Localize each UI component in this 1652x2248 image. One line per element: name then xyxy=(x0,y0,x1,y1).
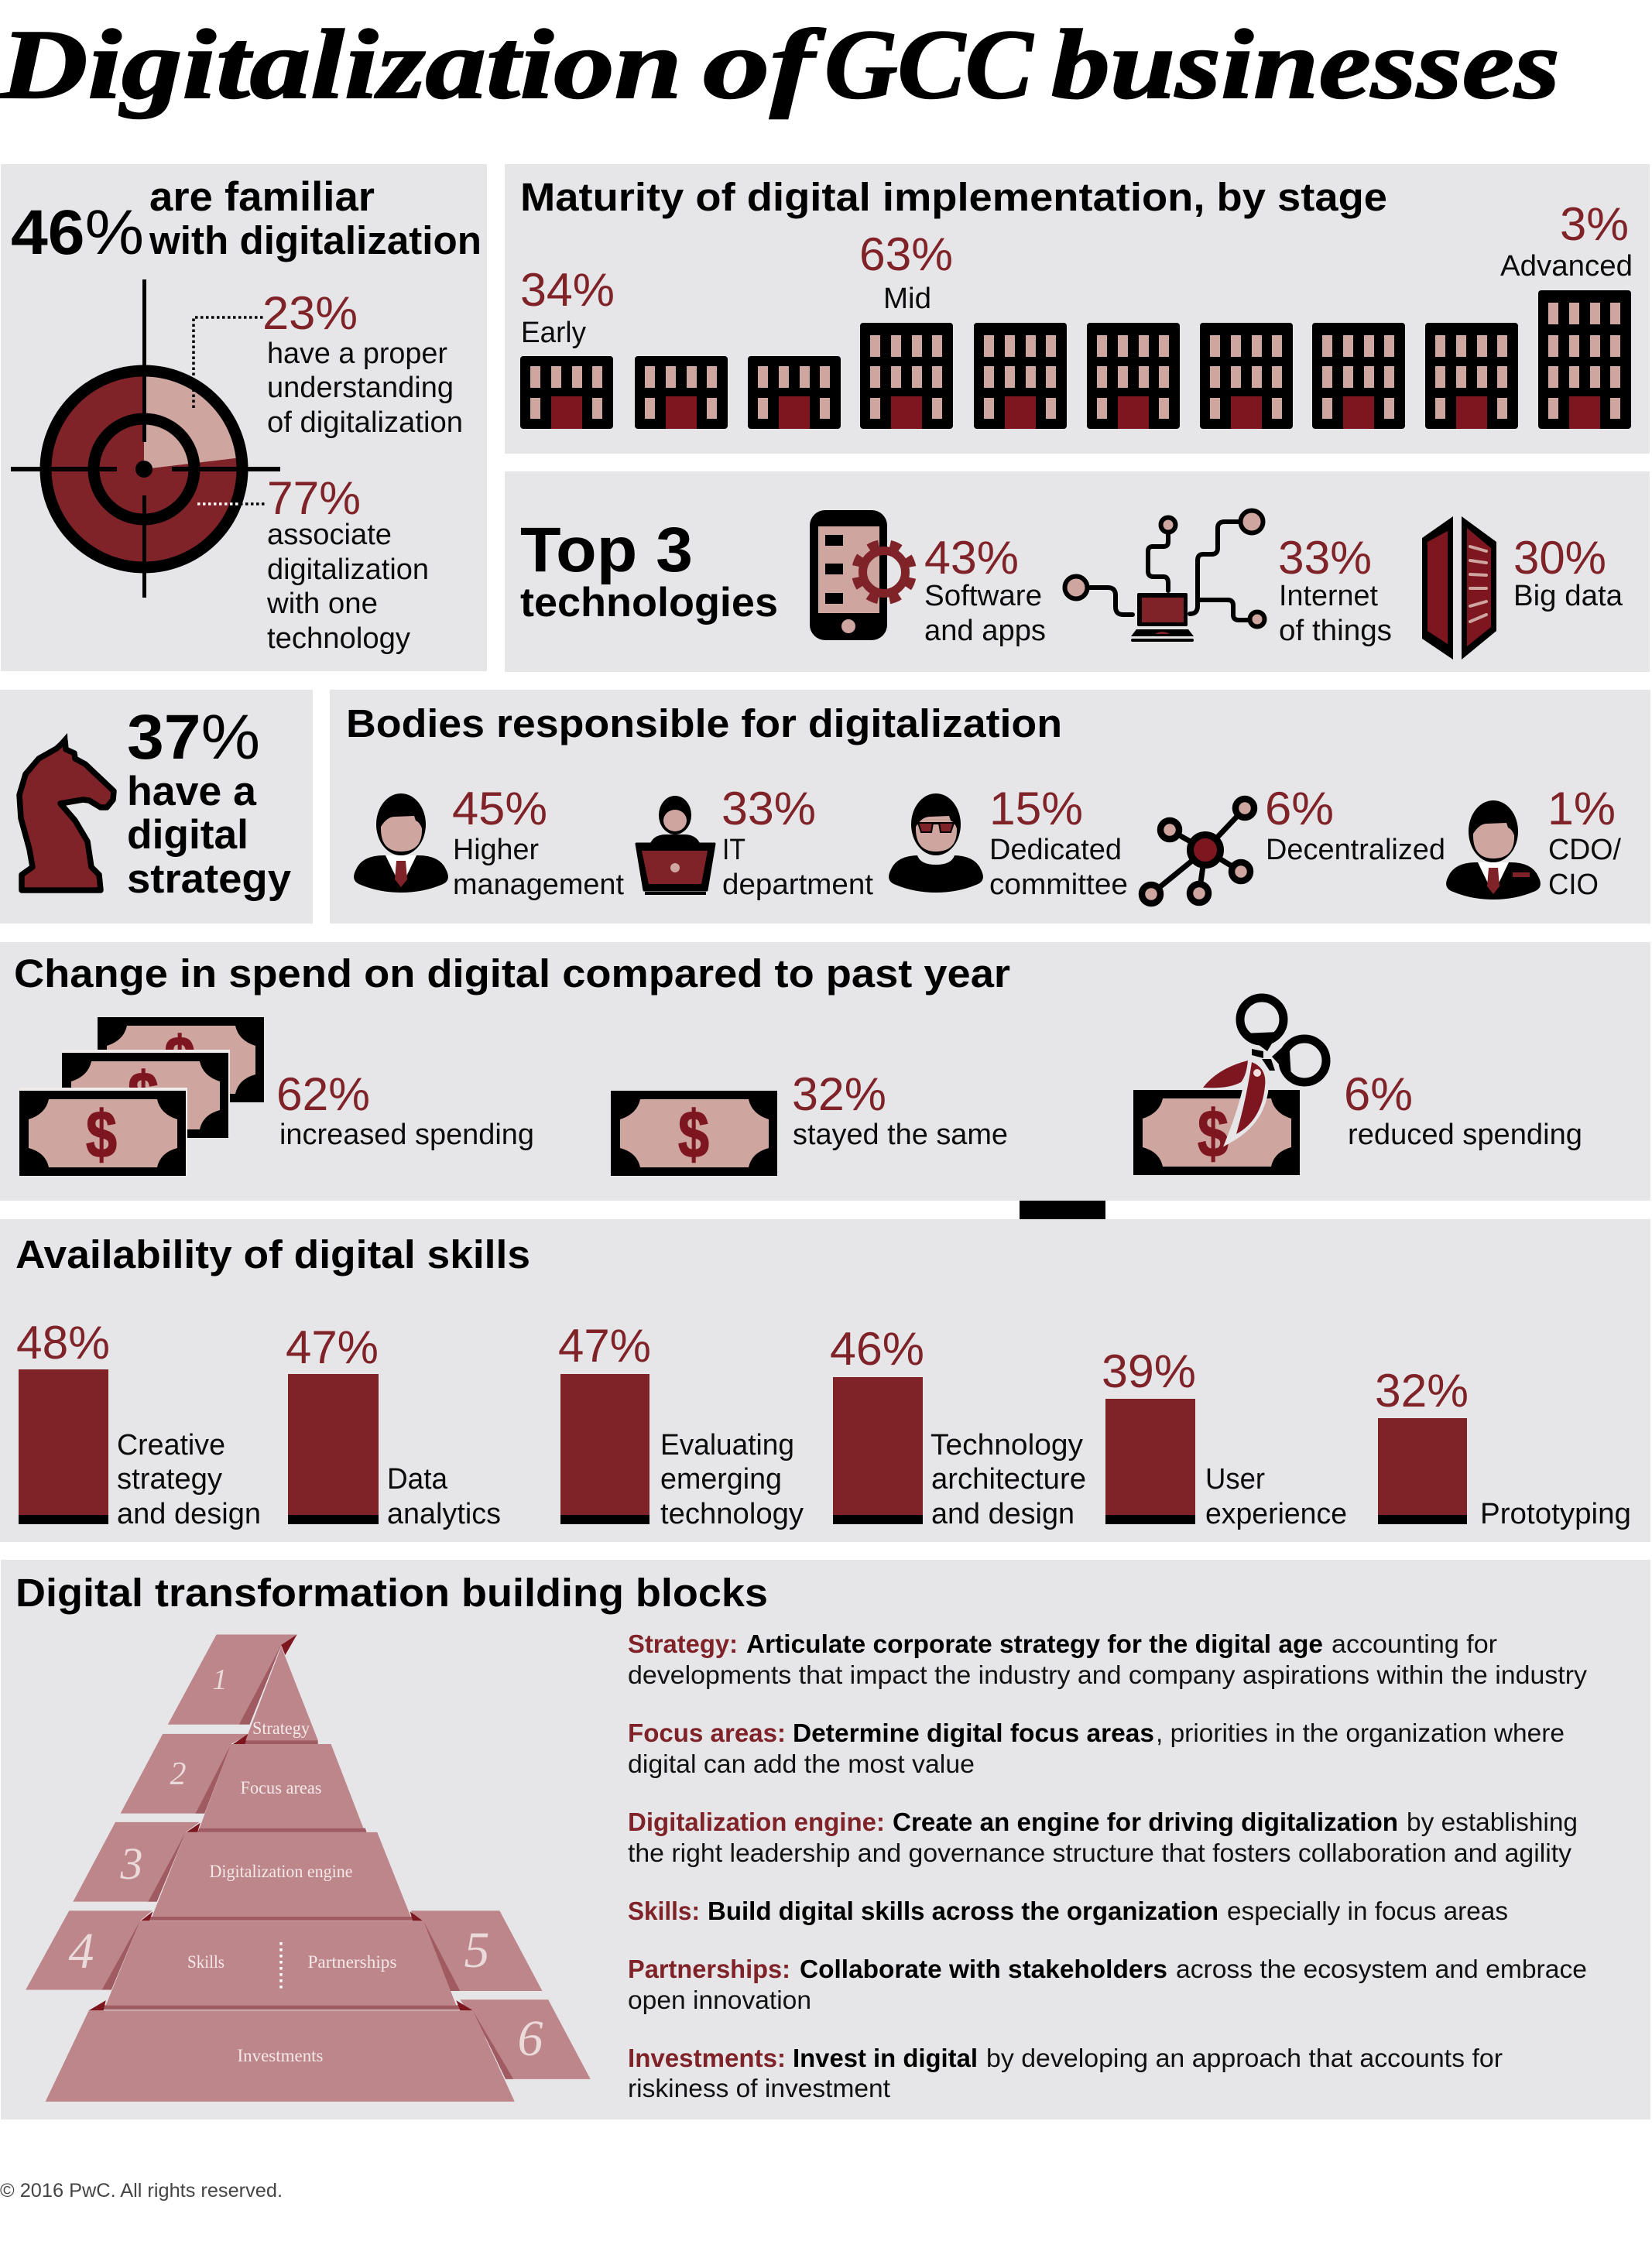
text: focus areas xyxy=(628,1719,1565,1778)
bar: data analytics xyxy=(286,1321,501,1530)
stat: advanced: 3% xyxy=(1560,198,1629,250)
diagram: pyramid: 4 xyxy=(68,1923,94,1979)
text: strategy xyxy=(628,1629,1588,1689)
bar: evaluating emerging technology xyxy=(558,1320,804,1530)
diagram: pyramid: Focus areas xyxy=(240,1778,322,1797)
title: GCC xyxy=(824,9,1034,119)
stat: advanced xyxy=(1500,198,1633,283)
stat: stayed: stayed the same xyxy=(793,1119,1008,1151)
bar: technology architecture xyxy=(830,1323,1086,1530)
panel: availability of digital skills xyxy=(0,1219,1650,1542)
icon: chess knight xyxy=(19,733,114,890)
text: partnerships xyxy=(628,1955,1587,2014)
panel: maturity by stage xyxy=(505,164,1650,454)
stat: early: Early xyxy=(521,317,586,349)
stat: 23%: 23% xyxy=(262,287,358,339)
stat: higher management xyxy=(452,783,624,901)
stat: IT department: IT xyxy=(722,834,745,866)
stat: software xyxy=(924,532,1046,647)
panel: digital strategy xyxy=(0,690,313,924)
stat: big data: 30% xyxy=(1513,532,1606,584)
text: skills: especially in focus areas xyxy=(1227,1897,1508,1925)
stat: big data: Big data xyxy=(1513,580,1623,612)
text: digitalization engine: Digitalization engine: xyxy=(628,1808,885,1836)
heading: maturity: Maturity of digital implementation, by stage xyxy=(520,175,1387,219)
bar: user experience: experience xyxy=(1205,1498,1347,1530)
bar: user experience: 39% xyxy=(1102,1345,1196,1397)
stat: decentralized: Decentralized xyxy=(1266,834,1445,866)
copyright: © 2016 PwC. All rights reserved. xyxy=(0,2180,283,2202)
text: investments xyxy=(628,2044,1503,2102)
text: partnerships: across the ecosystem and embrace xyxy=(1176,1955,1587,1983)
stat: increased: 62% xyxy=(276,1068,370,1120)
diagram: pyramid: Digitalization engine xyxy=(209,1862,353,1881)
bar: creative strategy xyxy=(16,1317,261,1530)
heading: top 3 xyxy=(520,515,778,625)
stat: mid xyxy=(859,228,953,315)
diagram: pyramid: 2 xyxy=(170,1756,186,1792)
icon: bill with scissors: $ xyxy=(1198,1097,1229,1171)
bar: creative strategy: and design xyxy=(117,1498,261,1530)
icon: stack of bills: $ xyxy=(128,1059,159,1133)
text: investments: Invest in digital xyxy=(793,2044,978,2072)
panel: familiarity with digitalization xyxy=(1,164,487,671)
heading: skills: Availability of digital skills xyxy=(15,1232,530,1276)
bar: technology architecture: 46% xyxy=(830,1323,924,1375)
heading: top 3: technologies xyxy=(520,580,778,625)
stat: software: Software xyxy=(924,580,1042,612)
text: focus areas: digital can add the most value xyxy=(628,1749,975,1778)
diagram: pyramid: 1 xyxy=(212,1664,228,1696)
icon: connected laptop xyxy=(1065,511,1265,642)
bar: creative strategy: 48% xyxy=(16,1317,110,1369)
stat: advanced: Advanced xyxy=(1500,250,1633,283)
stat: dedicated committee: 15% xyxy=(989,783,1083,834)
icon: single bill: $ xyxy=(678,1098,709,1172)
text: partnerships: Collaborate with stakeholders xyxy=(800,1955,1167,1983)
heading: familiar xyxy=(149,174,482,262)
diagram: pyramid xyxy=(26,1634,591,2102)
text: partnerships: open innovation xyxy=(628,1986,811,2014)
title: of xyxy=(703,9,826,119)
diagram: pyramid: Investments xyxy=(237,2046,324,2065)
dotted leader: 77% xyxy=(197,502,266,505)
stat: internet of things xyxy=(1278,532,1392,647)
text: investments: Investments: xyxy=(628,2044,786,2072)
stat: CDO/CIO: CIO xyxy=(1548,869,1599,901)
bar: prototyping: 32% xyxy=(1375,1365,1469,1417)
bar: technology architecture: architecture xyxy=(931,1463,1086,1496)
stat: mid: Mid xyxy=(883,283,931,315)
stat: stayed: 32% xyxy=(792,1068,886,1120)
stat: 77%: associate xyxy=(267,519,392,551)
panel: building blocks xyxy=(1,1560,1650,2119)
text: skills: Skills: xyxy=(628,1897,700,1925)
diagram: pyramid: 3 xyxy=(119,1838,142,1889)
stat: software: and apps xyxy=(924,615,1046,647)
bar: prototyping xyxy=(1375,1365,1631,1530)
stat: decentralized xyxy=(1265,783,1445,866)
stat: 77%: with one xyxy=(266,588,378,620)
diagram: pyramid: Partnerships xyxy=(308,1952,397,1972)
text: focus areas: Focus areas: xyxy=(628,1719,786,1747)
icon: single bill xyxy=(611,1091,777,1176)
stat: higher management: management xyxy=(453,869,624,901)
icon: server xyxy=(1422,516,1496,660)
black tab xyxy=(1020,1201,1105,1219)
diagram: pyramid: 6 xyxy=(517,2010,543,2067)
icon: stack of bills xyxy=(19,1017,264,1176)
stat: increased: increased spending xyxy=(279,1119,534,1151)
heading: bodies: Bodies responsible for digitalization xyxy=(346,701,1062,745)
stat: 46%: 46% xyxy=(11,197,144,268)
stat: 77%: 77% xyxy=(267,472,361,524)
stat: 23%: have a proper xyxy=(267,338,447,370)
text: have a digital strategy: have a xyxy=(127,769,257,814)
bar: creative strategy: Creative xyxy=(117,1429,225,1462)
bar: evaluating emerging technology: technology xyxy=(660,1498,804,1530)
title: businesses xyxy=(1051,9,1560,119)
text: skills: Build digital skills across the organization xyxy=(708,1897,1218,1925)
bar: creative strategy: strategy xyxy=(117,1463,222,1496)
panel: change in spend xyxy=(0,942,1650,1201)
icon: person with laptop xyxy=(636,796,715,895)
heading: building blocks: Digital transformation building blocks xyxy=(15,1571,768,1615)
text: have a digital strategy: strategy xyxy=(127,856,292,902)
stat: stayed xyxy=(792,1068,1008,1151)
icon: bill with scissors xyxy=(1133,998,1326,1175)
heading: familiar: with digitalization xyxy=(149,218,482,262)
text: investments: by developing an approach that accounts for xyxy=(986,2044,1503,2072)
title: Digitalization xyxy=(0,9,682,119)
bar: prototyping: Prototyping xyxy=(1480,1498,1631,1530)
stat: dedicated committee: Dedicated xyxy=(989,834,1122,866)
stat: internet of things: 33% xyxy=(1278,532,1372,584)
text: digitalization engine xyxy=(628,1808,1578,1867)
stat: mid: 63% xyxy=(859,228,953,280)
text: strategy: Strategy: xyxy=(628,1629,738,1658)
bar: technology architecture: and design xyxy=(931,1498,1074,1530)
stat: increased xyxy=(276,1068,534,1151)
bar: user experience xyxy=(1102,1345,1347,1530)
diagram: pyramid: Strategy xyxy=(252,1719,310,1738)
icon: stack of bills: $ xyxy=(164,1023,195,1098)
text: strategy: accounting for xyxy=(1332,1629,1497,1658)
diagram: pyramid: Skills xyxy=(187,1952,224,1972)
stat: reduced: 6% xyxy=(1344,1068,1413,1120)
bar: data analytics: analytics xyxy=(387,1498,501,1530)
text: focus areas: Determine digital focus areas xyxy=(793,1719,1154,1747)
stat: dedicated committee: committee xyxy=(989,869,1128,901)
heading: spend: Change in spend on digital compared to past year xyxy=(14,951,1010,995)
stat: CDO/CIO: CDO/ xyxy=(1548,834,1621,866)
text: strategy: Articulate corporate strategy for the digital age xyxy=(746,1629,1323,1658)
stat: IT department: department xyxy=(722,869,873,901)
bar: evaluating emerging technology: Evaluating xyxy=(660,1429,794,1462)
heading: top 3: Top 3 xyxy=(520,515,693,585)
bar: technology architecture: Technology xyxy=(931,1429,1083,1462)
stat: 77%: technology xyxy=(267,622,410,655)
stat: internet of things: of things xyxy=(1279,615,1392,647)
stat: CDO/CIO xyxy=(1547,783,1621,901)
stat: dedicated committee xyxy=(989,783,1128,901)
text: have a digital strategy xyxy=(127,769,292,902)
stat: early: 34% xyxy=(520,264,615,316)
text: digitalization engine: by establishing xyxy=(1407,1808,1578,1836)
stat: reduced: reduced spending xyxy=(1348,1119,1582,1151)
icon: target pie xyxy=(11,279,280,598)
stat: reduced xyxy=(1344,1068,1582,1151)
bar: data analytics: 47% xyxy=(286,1321,379,1373)
stat: IT department: 33% xyxy=(721,783,816,834)
bar: evaluating emerging technology: 47% xyxy=(558,1320,651,1372)
stat: early xyxy=(520,264,615,349)
icon: manager xyxy=(354,793,448,893)
text: skills xyxy=(628,1897,1508,1925)
icon: stack of bills: $ xyxy=(86,1098,117,1172)
stat: 23%: understanding xyxy=(267,372,454,404)
stat: big data xyxy=(1513,532,1623,612)
icon: phone with gear xyxy=(810,510,918,640)
diagram: pyramid: 5 xyxy=(464,1922,489,1979)
stat: higher management: Higher xyxy=(453,834,539,866)
bar: user experience: User xyxy=(1205,1463,1265,1496)
dotted leader: 23% xyxy=(194,317,263,408)
icon: network xyxy=(1142,799,1254,903)
stat: internet of things: Internet xyxy=(1279,580,1378,612)
stat: 77%: digitalization xyxy=(267,553,429,586)
stat: 23%: of digitalization xyxy=(267,406,463,439)
stat: IT department xyxy=(721,783,873,901)
text: partnerships: Partnerships: xyxy=(628,1955,790,1983)
text: digitalization engine: the right leadership and governance structure that fosters collaboration and agility xyxy=(628,1838,1572,1867)
stat: 37%: 37% xyxy=(127,702,260,773)
stat: 77% xyxy=(266,472,429,655)
text: focus areas: , priorities in the organization where xyxy=(1156,1719,1565,1747)
stat: software: 43% xyxy=(924,532,1019,584)
stat: CDO/CIO: 1% xyxy=(1547,783,1616,834)
icon: executive xyxy=(1446,800,1541,900)
text: strategy: developments that impact the industry and company aspirations within the industry xyxy=(628,1660,1588,1689)
icon row: buildings xyxy=(520,290,1631,429)
stat: decentralized: 6% xyxy=(1265,783,1334,834)
bar: data analytics: Data xyxy=(387,1463,448,1496)
text: have a digital strategy: digital xyxy=(127,812,248,858)
bar: evaluating emerging technology: emerging xyxy=(660,1463,782,1496)
icon: person with glasses xyxy=(889,793,983,893)
heading: familiar: are familiar xyxy=(149,174,375,220)
panel: bodies responsible xyxy=(330,690,1650,924)
text: investments: riskiness of investment xyxy=(628,2074,890,2102)
title xyxy=(0,9,1560,119)
text: digitalization engine: Create an engine for driving digitalization xyxy=(893,1808,1398,1836)
panel: top 3 technologies xyxy=(505,471,1650,672)
stat: 23% xyxy=(262,287,463,439)
stat: higher management: 45% xyxy=(452,783,547,834)
